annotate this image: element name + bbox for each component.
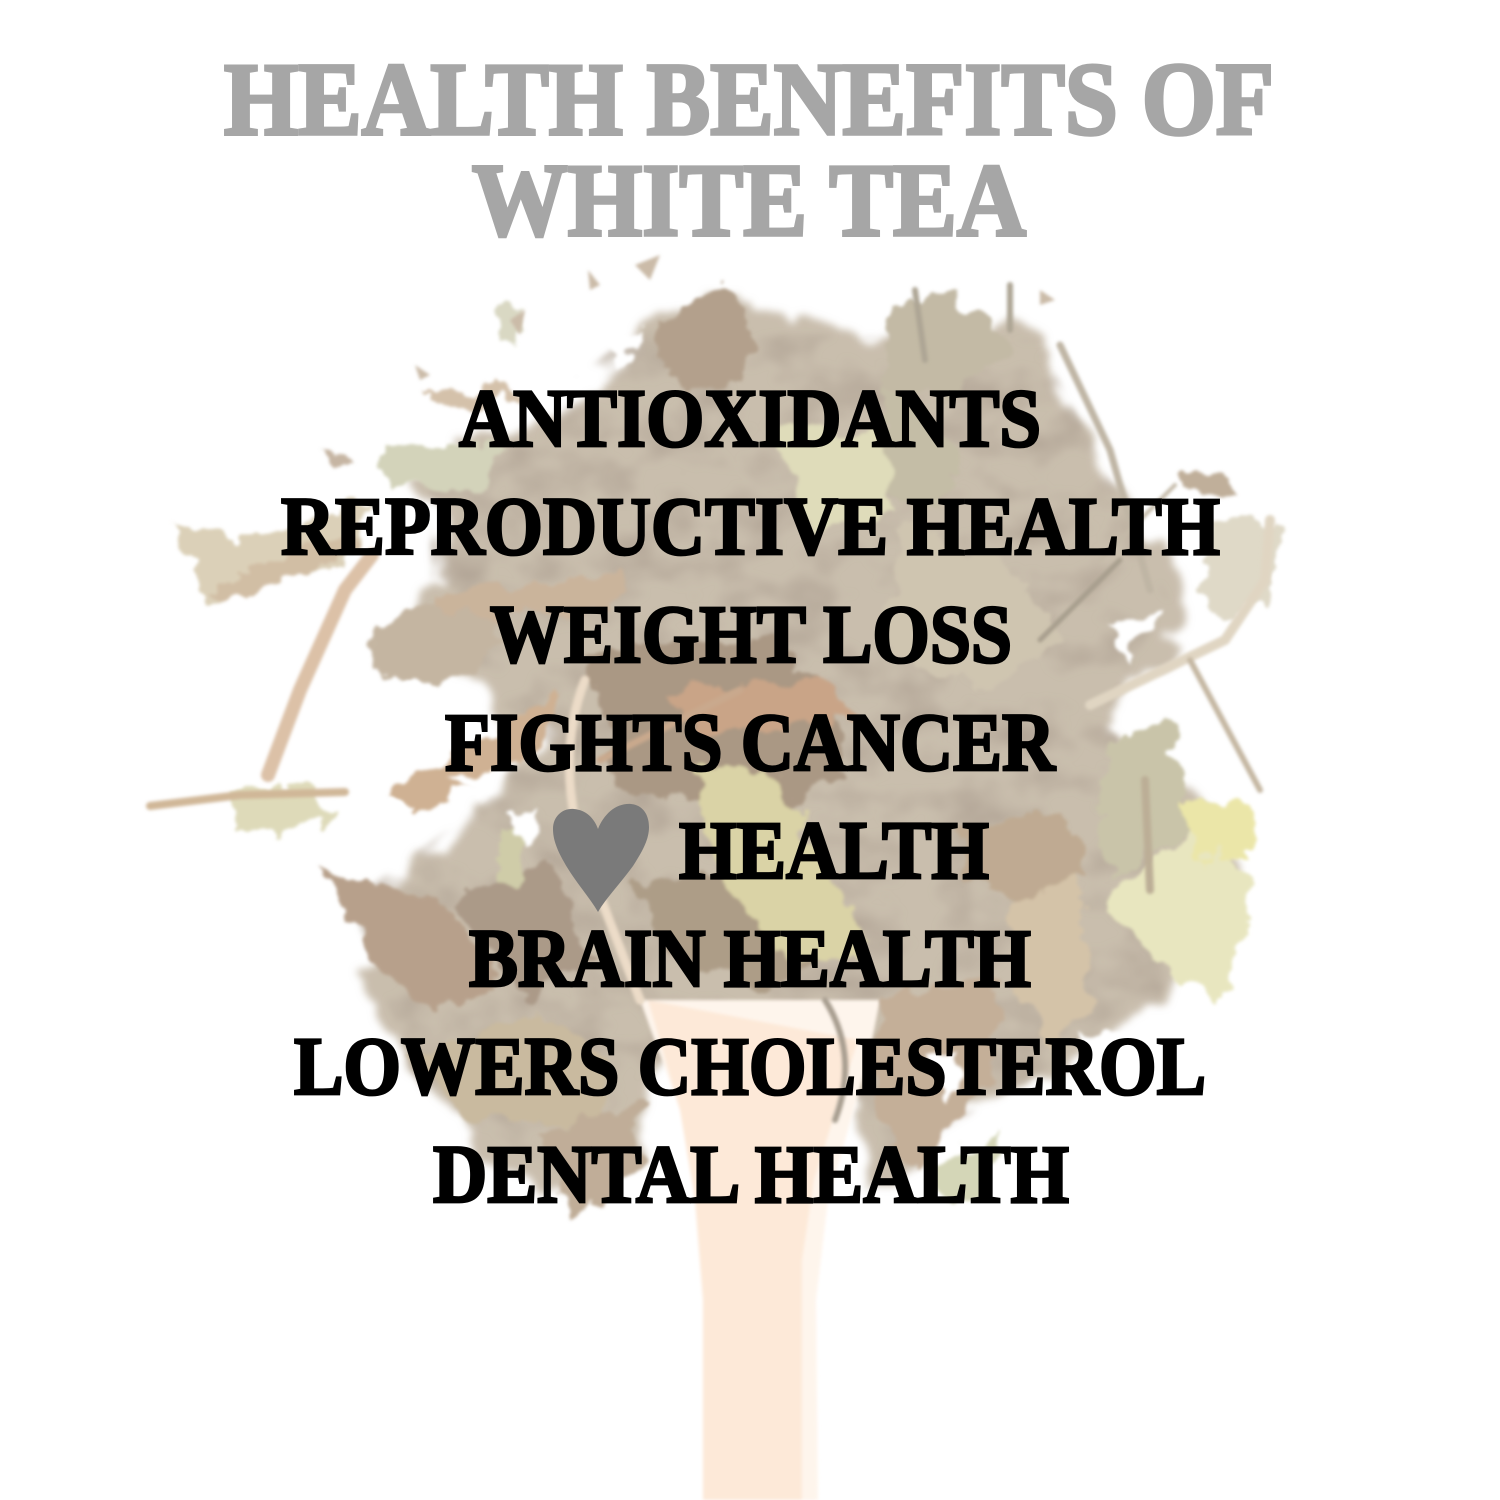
benefit: lowers cholesterol: LOWERS CHOLESTEROL: [294, 1020, 1206, 1112]
benefit: heart health: HEALTH: [679, 804, 989, 896]
background: tea leaves on wooden spoon: [150, 255, 1285, 1500]
icon: heart: [553, 804, 649, 912]
benefits list: [281, 372, 1220, 1220]
title line 1: HEALTH BENEFITS OF: [224, 42, 1274, 157]
benefit: fights cancer: FIGHTS CANCER: [445, 696, 1056, 788]
individual leaves: [172, 290, 1285, 1225]
title line 2: WHITE TEA: [472, 143, 1026, 258]
benefit: dental health: DENTAL HEALTH: [433, 1128, 1069, 1220]
benefit: brain health: BRAIN HEALTH: [469, 912, 1031, 1004]
benefit: weight loss: WEIGHT LOSS: [490, 588, 1012, 680]
loose leaf pile base: [350, 290, 1225, 1200]
benefit: antioxidants: ANTIOXIDANTS: [459, 372, 1041, 464]
wooden spoon: [640, 1000, 880, 1500]
small leaf fragments: [415, 255, 1055, 380]
title: [224, 42, 1274, 258]
twigs and stems: [150, 285, 1270, 1120]
white gaps between leaves: [330, 330, 1160, 1100]
mottled shadows in the pile: [350, 330, 1210, 1180]
benefit: reproductive health: REPRODUCTIVE HEALTH: [281, 480, 1220, 572]
